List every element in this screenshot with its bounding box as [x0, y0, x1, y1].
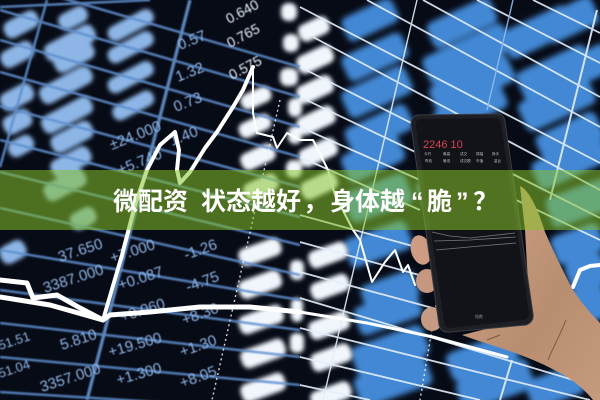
- background: printed market numbers: +1.30: [178, 332, 219, 361]
- background: printed market numbers: 0.765: [224, 20, 263, 51]
- background: printed market numbers: 3387.000: [41, 261, 106, 297]
- background: grid lines, left blue part: [0, 0, 300, 400]
- background: blurred pale data blocks, left: [0, 7, 153, 263]
- title: ？: [473, 188, 498, 216]
- background: printed market numbers: 0.57: [175, 27, 209, 54]
- phone home label: 指数: [475, 313, 483, 319]
- phone screen: [416, 118, 529, 328]
- background: printed market numbers: 1.40: [167, 123, 201, 150]
- finger: index: [407, 233, 435, 267]
- icon: hand holding the phone: [407, 186, 600, 400]
- phone stats: 成交额: [460, 158, 471, 163]
- phone price: 2246 10: [423, 139, 463, 151]
- background: printed market numbers: 3357.000: [38, 360, 103, 396]
- finger: middle: [416, 269, 438, 293]
- background: blurred blue data blocks, right: [343, 0, 600, 400]
- background: printed market numbers: +8.30: [180, 300, 221, 329]
- phone body: [411, 114, 533, 332]
- phone stats: 市值: [476, 158, 484, 163]
- phone stats: 昨收: [425, 158, 433, 163]
- background: printed market numbers: -1.26: [182, 236, 220, 264]
- background: printed market numbers: +8.05: [178, 363, 219, 392]
- background: printed market numbers: 5.810: [58, 326, 99, 354]
- icon: smartphone: [411, 114, 533, 332]
- title: 脆: [427, 188, 452, 216]
- background: printed market numbers: +7.000: [108, 236, 157, 267]
- background: printed market numbers: [0, 0, 265, 396]
- banner: translucent green band: [0, 170, 600, 230]
- phone stats: 成交: [460, 151, 468, 156]
- background: printed market numbers: 1.32: [173, 59, 207, 86]
- phone stats: 量比: [494, 158, 502, 163]
- background: printed market numbers: 0.575: [226, 52, 265, 83]
- background: printed market numbers: +1.300: [114, 360, 164, 389]
- title: 状态越好: [201, 188, 301, 216]
- title: ”: [456, 188, 468, 216]
- phone mini chart: [432, 232, 516, 250]
- background: printed market numbers: -4.75: [184, 268, 222, 296]
- phone stats: 最高: [443, 151, 451, 156]
- finger: ring: [421, 307, 443, 331]
- background: printed market numbers: +0.087: [116, 263, 165, 294]
- phone stats: 振幅: [476, 151, 484, 156]
- line chart: white market curve: [0, 67, 600, 357]
- background: grid lines, right white part: [212, 0, 600, 400]
- phone stats: [424, 151, 502, 163]
- background: printed market numbers: ±24.000: [107, 118, 164, 154]
- phone stats: 今开: [424, 151, 432, 156]
- palm crease: [487, 320, 566, 360]
- background: printed market numbers: +5.740: [115, 146, 164, 179]
- title: 身体越: [330, 188, 405, 216]
- background: printed market numbers: +19.500: [106, 329, 164, 361]
- phone stats: 换手: [492, 151, 500, 156]
- title: 微配资: [113, 188, 188, 216]
- title: “: [411, 188, 424, 216]
- background: printed market numbers: 0.73: [171, 89, 205, 116]
- phone stats: 最低: [443, 158, 451, 163]
- title: ，: [303, 188, 328, 216]
- background: blurred white data column: [239, 5, 352, 400]
- background: printed market numbers: 37.650: [56, 235, 105, 266]
- background: printed market numbers: +0.060: [118, 295, 167, 326]
- hand palm: [462, 186, 600, 400]
